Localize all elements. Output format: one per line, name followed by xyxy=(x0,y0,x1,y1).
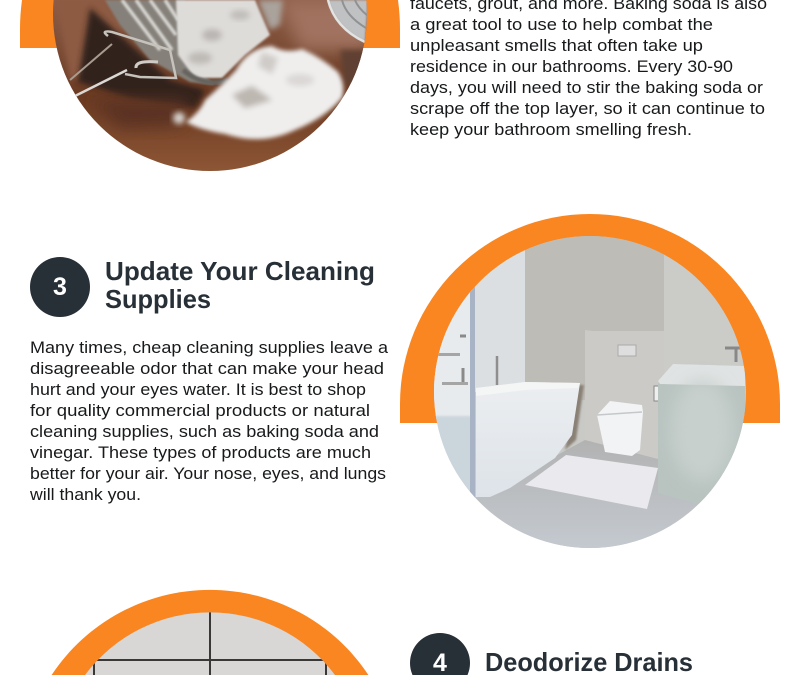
body text: section 3 xyxy=(29,338,389,504)
body text: section 3: cleaning supplies, such as baking soda and xyxy=(30,422,379,441)
body text: section 3: better for your air. Your nose, eyes, and lungs xyxy=(30,464,386,483)
heading: update your cleaning supplies: Update Your Cleaning xyxy=(105,256,375,286)
bath mat xyxy=(525,455,658,509)
body text: section 2: a great tool to use to help combat the xyxy=(410,15,713,34)
section 3: cleaning supplies xyxy=(29,214,780,560)
body text: section 3: disagreeable odor that can make your head xyxy=(30,359,384,378)
number badge 4 xyxy=(410,633,470,675)
body text: section 2: keep your bathroom smelling fresh. xyxy=(410,120,692,139)
toilet xyxy=(597,401,643,456)
orange arch: section 2 xyxy=(20,0,400,48)
heading: update your cleaning supplies: Supplies xyxy=(105,284,211,314)
glass shower tub xyxy=(436,416,470,492)
body text: section 2: scrape off the top layer, so it can continue to xyxy=(410,99,765,118)
section 2: baking soda xyxy=(20,0,767,175)
orange arch: section 4 xyxy=(52,590,368,675)
body text: section 2: days, you will need to stir the baking soda or xyxy=(410,78,763,97)
section 4: deodorize drains xyxy=(52,590,693,675)
number badge 3: 3 xyxy=(53,273,67,301)
number badge 3 xyxy=(30,257,90,317)
orange arch: section 3 xyxy=(400,214,780,423)
body text: section 2: residence in our bathrooms. Every 30-90 xyxy=(410,57,733,76)
body text: section 2 xyxy=(410,0,767,139)
heading: update your cleaning supplies xyxy=(105,256,375,314)
body text: section 3: vinegar. These types of products are much xyxy=(30,443,371,462)
vanity xyxy=(658,364,745,504)
photo: baking soda spilling from a jar xyxy=(50,0,370,175)
body text: section 3: will thank you. xyxy=(29,485,141,504)
body text: section 3: Many times, cheap cleaning supplies leave a xyxy=(30,338,389,357)
body text: section 3: hurt and your eyes water. It is best to shop xyxy=(30,380,366,399)
photo: white tiles with dark grout xyxy=(85,612,335,675)
body text: section 2: unpleasant smells that often take up xyxy=(410,36,703,55)
body text: section 3: for quality commercial products or natural xyxy=(30,401,370,420)
photo: modern bathroom xyxy=(430,230,750,560)
